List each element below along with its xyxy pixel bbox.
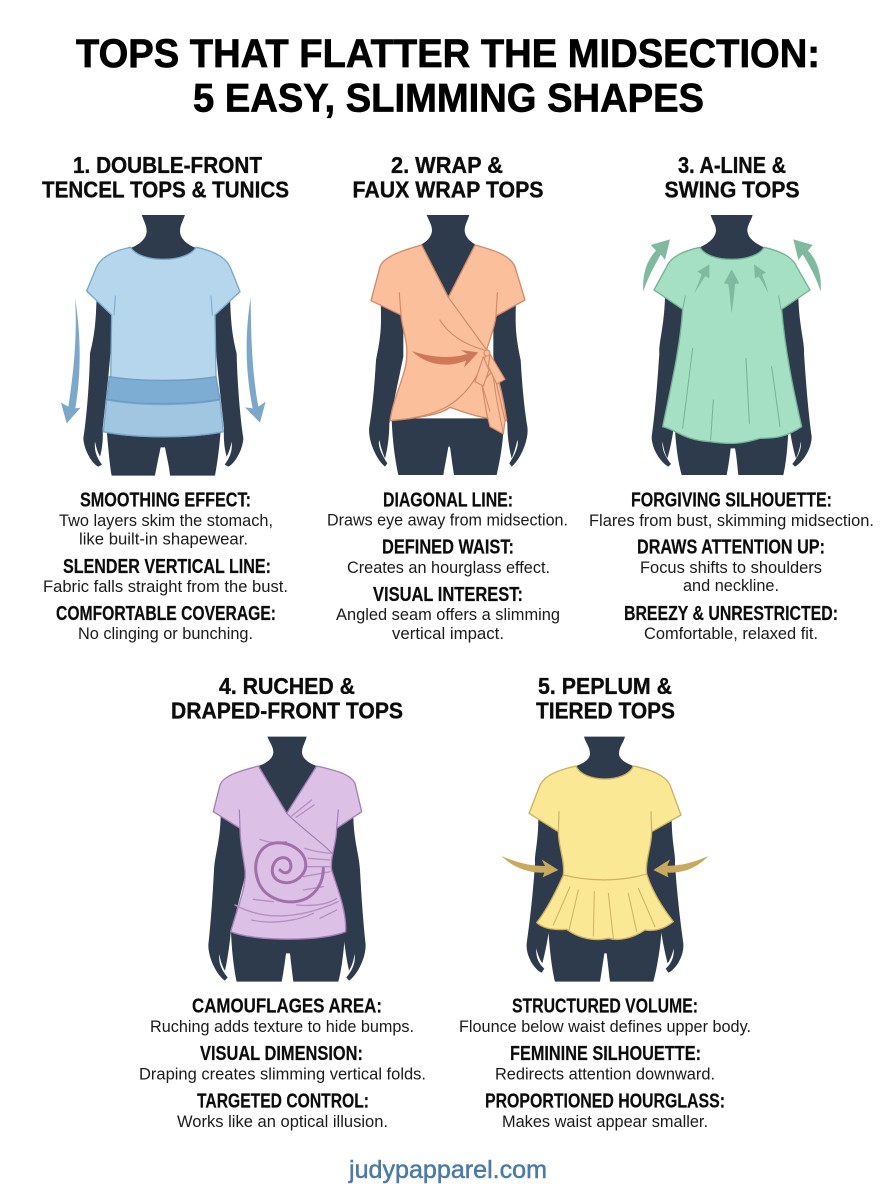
text block: ruched benefits — [139, 996, 426, 1131]
arrow: outer left up — [643, 239, 670, 292]
panel: a-line tops — [589, 152, 874, 643]
text block: wrap benefits: vertical impact. — [392, 624, 504, 643]
title: 5 EASY, SLIMMING SHAPES — [193, 76, 704, 120]
arrow: outer right up — [793, 239, 821, 292]
heading: a-line — [664, 152, 800, 202]
heading: wrap: FAUX WRAP TOPS — [352, 176, 544, 202]
text block: a-line benefits: Flares from bust, skimming midsection. — [589, 511, 874, 530]
text block: a-line benefits: DRAWS ATTENTION UP: — [637, 536, 825, 558]
heading: a-line: SWING TOPS — [664, 176, 800, 202]
figure: blue tee on silhouette — [61, 215, 266, 476]
figure: peach wrap top on silhouette — [369, 215, 528, 475]
text block: ruched benefits: TARGETED CONTROL: — [197, 1090, 369, 1112]
heading: peplum: TIERED TOPS — [536, 698, 675, 724]
text block: double-front benefits: SLENDER VERTICAL LINE: — [63, 556, 271, 578]
panel: peplum tops — [459, 673, 751, 1131]
heading: peplum: 5. PEPLUM & — [538, 673, 672, 699]
text block: peplum benefits: Makes waist appear smaller. — [502, 1112, 708, 1131]
figure: green swing top on silhouette — [643, 215, 821, 475]
text block: a-line benefits — [589, 490, 874, 643]
text block: a-line benefits: FORGIVING SILHOUETTE: — [631, 490, 832, 512]
arrow: left downward — [61, 297, 81, 423]
arrow: inner right up — [754, 264, 768, 294]
text block: ruched benefits: Works like an optical illusion. — [177, 1112, 388, 1131]
text block: ruched benefits: CAMOUFLAGES AREA: — [192, 996, 382, 1018]
text block: double-front benefits: like built-in shapewear. — [79, 530, 248, 548]
text block: peplum benefits: PROPORTIONED HOURGLASS: — [485, 1090, 725, 1112]
text block: wrap benefits: DIAGONAL LINE: — [383, 490, 513, 512]
text block: double-front benefits: Two layers skim the stomach, — [59, 511, 273, 530]
text block: wrap benefits — [327, 490, 568, 643]
text block: double-front benefits: SMOOTHING EFFECT: — [80, 490, 251, 512]
text block: peplum benefits: STRUCTURED VOLUME: — [512, 996, 698, 1018]
text block: a-line benefits: and neckline. — [683, 576, 779, 595]
footer url: judypapparel.com — [348, 1156, 547, 1184]
text block: ruched benefits: Ruching adds texture to hide bumps. — [150, 1017, 414, 1036]
text block: a-line benefits: Comfortable, relaxed fit. — [644, 624, 818, 643]
text block: peplum benefits: Flounce below waist defines upper body. — [459, 1017, 751, 1036]
text block: peplum benefits — [459, 996, 751, 1131]
figure: yellow peplum top on silhouette — [502, 737, 708, 982]
panel: ruched tops — [139, 673, 426, 1131]
text block: double-front benefits: No clinging or bunching. — [78, 624, 253, 643]
tie knot and tails — [475, 350, 505, 434]
heading: a-line: 3. A-LINE & — [678, 152, 786, 178]
text block: wrap benefits: Creates an hourglass effect. — [347, 558, 550, 577]
heading: wrap — [352, 152, 544, 202]
heading: double-front: 1. DOUBLE-FRONT — [73, 152, 263, 178]
text block: double-front benefits: COMFORTABLE COVERAGE: — [56, 603, 276, 625]
arrow: center up — [724, 269, 739, 313]
text block: a-line benefits: BREEZY & UNRESTRICTED: — [624, 603, 838, 625]
arrow: right downward — [245, 297, 266, 423]
arrow: left inward — [502, 856, 558, 877]
arrow: right inward — [653, 856, 708, 877]
heading: double-front: TENCEL TOPS & TUNICS — [42, 176, 289, 202]
heading: wrap: 2. WRAP & — [391, 152, 503, 178]
text block: ruched benefits: VISUAL DIMENSION: — [200, 1043, 363, 1065]
text block: a-line benefits: Focus shifts to shoulders — [640, 558, 822, 577]
text block: wrap benefits: DEFINED WAIST: — [382, 536, 514, 558]
arrow: inner left up — [694, 264, 709, 294]
text block: ruched benefits: Draping creates slimming vertical folds. — [139, 1064, 426, 1084]
heading: ruched: DRAPED-FRONT TOPS — [171, 698, 403, 724]
heading: ruched — [171, 673, 403, 724]
spiral ruching — [256, 843, 323, 902]
text block: peplum benefits: FEMININE SILHOUETTE: — [510, 1043, 701, 1065]
text block: peplum benefits: Redirects attention downward. — [495, 1064, 715, 1084]
figure: purple ruched top on silhouette — [208, 737, 366, 982]
text block: wrap benefits: Angled seam offers a slimming — [336, 605, 560, 624]
title: TOPS THAT FLATTER THE MIDSECTION: — [76, 32, 820, 76]
heading: double-front — [42, 152, 289, 202]
text block: double-front benefits — [43, 490, 288, 643]
text block: double-front benefits: Fabric falls straight from the bust. — [43, 577, 288, 596]
heading: peplum — [536, 673, 675, 724]
title — [76, 32, 820, 120]
text block: wrap benefits: VISUAL INTEREST: — [373, 584, 523, 606]
arrow: towards tie — [412, 350, 478, 368]
heading: ruched: 4. RUCHED & — [219, 673, 355, 699]
text block: wrap benefits: Draws eye away from midsection. — [327, 510, 568, 530]
panel: wrap tops — [327, 152, 568, 643]
panel: double-front tops — [42, 152, 289, 643]
